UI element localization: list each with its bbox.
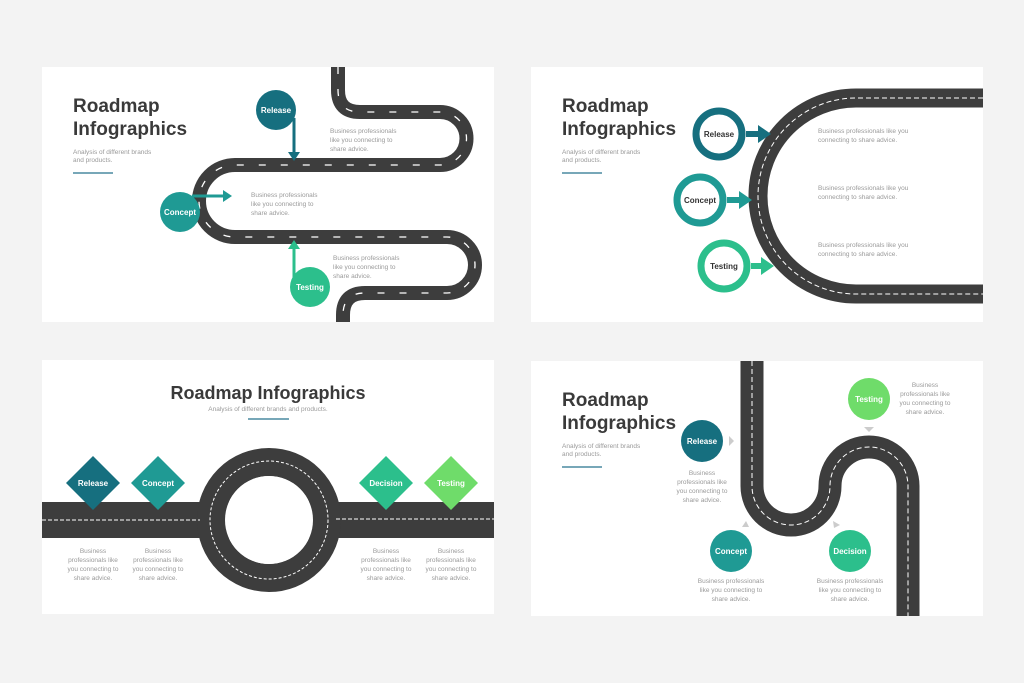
descriptions: like you connecting to	[700, 587, 763, 594]
subtitle: Analysis of different brands and products.	[208, 406, 328, 413]
descriptions: share advice.	[367, 575, 406, 582]
marker: release: Release	[704, 130, 735, 139]
marker: testing: Testing	[710, 262, 738, 271]
panel: S-curve road	[531, 361, 983, 616]
descriptions: you connecting to	[677, 488, 728, 495]
marker: decision	[829, 521, 871, 572]
marker: release	[681, 420, 734, 462]
panel: roundabout road	[42, 360, 494, 614]
descriptions: professionals like	[361, 557, 411, 564]
subtitle: and products.	[562, 451, 602, 458]
descriptions: Business professionals	[333, 255, 399, 262]
marker: testing: Testing	[855, 395, 883, 404]
diamond: testing	[424, 456, 478, 510]
descriptions: Business	[438, 548, 464, 555]
descriptions	[677, 382, 951, 603]
descriptions: share advice.	[74, 575, 113, 582]
descriptions: connecting to share advice.	[818, 251, 897, 258]
descriptions: share advice.	[330, 146, 369, 153]
descriptions: share advice.	[831, 596, 870, 603]
marker: concept: Concept	[164, 208, 196, 217]
road	[199, 67, 475, 322]
descriptions: you connecting to	[68, 566, 119, 573]
descriptions: you connecting to	[900, 400, 951, 407]
descriptions: Business professionals like you	[818, 185, 908, 192]
marker: concept	[160, 190, 232, 232]
marker: testing	[288, 240, 330, 307]
subtitle: and products.	[562, 157, 602, 164]
descriptions	[251, 128, 400, 280]
marker: testing: Testing	[296, 283, 324, 292]
descriptions: professionals like	[133, 557, 183, 564]
subtitle: Analysis of different brands	[73, 149, 151, 156]
descriptions: Business professionals	[251, 192, 317, 199]
descriptions: you connecting to	[426, 566, 477, 573]
title: Roadmap	[562, 390, 649, 411]
subtitle: and products.	[73, 157, 113, 164]
diamond: testing: Testing	[437, 479, 465, 488]
subtitle: Analysis of different brands	[562, 149, 640, 156]
diamond: release	[66, 456, 120, 510]
descriptions: Business	[145, 548, 171, 555]
descriptions: professionals like	[426, 557, 476, 564]
marker: concept	[677, 177, 752, 223]
descriptions: share advice.	[139, 575, 178, 582]
marker: release	[256, 90, 300, 161]
title: Infographics	[562, 119, 676, 140]
marker: release: Release	[687, 437, 718, 446]
descriptions: you connecting to	[133, 566, 184, 573]
descriptions: Business professionals like you	[818, 242, 908, 249]
descriptions: share advice.	[432, 575, 471, 582]
descriptions: share advice.	[251, 210, 290, 217]
subtitle: Analysis of different brands	[562, 443, 640, 450]
title: Roadmap	[73, 96, 160, 117]
descriptions	[68, 548, 477, 582]
descriptions: Business	[80, 548, 106, 555]
diamond: decision: Decision	[369, 479, 403, 488]
marker: testing	[701, 243, 774, 289]
title: Roadmap	[562, 96, 649, 117]
descriptions: Business	[912, 382, 938, 389]
road	[752, 361, 908, 616]
descriptions: like you connecting to	[819, 587, 882, 594]
descriptions: professionals like	[900, 391, 950, 398]
marker: concept: Concept	[684, 196, 716, 205]
descriptions: like you connecting to	[333, 264, 396, 271]
descriptions: connecting to share advice.	[818, 137, 897, 144]
descriptions	[818, 128, 909, 258]
road	[42, 461, 494, 579]
descriptions: Business	[373, 548, 399, 555]
descriptions: Business professionals like you	[818, 128, 908, 135]
road	[758, 98, 983, 294]
marker: concept: Concept	[715, 547, 747, 556]
panel: horseshoe road	[531, 67, 983, 322]
descriptions: like you connecting to	[330, 137, 393, 144]
diamond: concept: Concept	[142, 479, 174, 488]
marker: testing	[848, 378, 890, 432]
marker: decision: Decision	[833, 547, 867, 556]
panel: winding road	[42, 67, 494, 322]
title: Infographics	[562, 413, 676, 434]
diamond: decision	[359, 456, 413, 510]
descriptions: you connecting to	[361, 566, 412, 573]
descriptions: professionals like	[68, 557, 118, 564]
descriptions: share advice.	[333, 273, 372, 280]
marker: concept	[710, 521, 752, 572]
marker: release	[696, 111, 771, 157]
descriptions: Business professionals	[698, 578, 764, 585]
descriptions: professionals like	[677, 479, 727, 486]
diamond: concept	[131, 456, 185, 510]
marker: release: Release	[261, 106, 292, 115]
descriptions: like you connecting to	[251, 201, 314, 208]
title: Roadmap Infographics	[170, 383, 366, 403]
diamond: release: Release	[78, 479, 109, 488]
descriptions: Business	[689, 470, 715, 477]
descriptions: share advice.	[683, 497, 722, 504]
descriptions: connecting to share advice.	[818, 194, 897, 201]
descriptions: share advice.	[712, 596, 751, 603]
descriptions: Business professionals	[817, 578, 883, 585]
title: Infographics	[73, 119, 187, 140]
descriptions: share advice.	[906, 409, 945, 416]
descriptions: Business professionals	[330, 128, 396, 135]
